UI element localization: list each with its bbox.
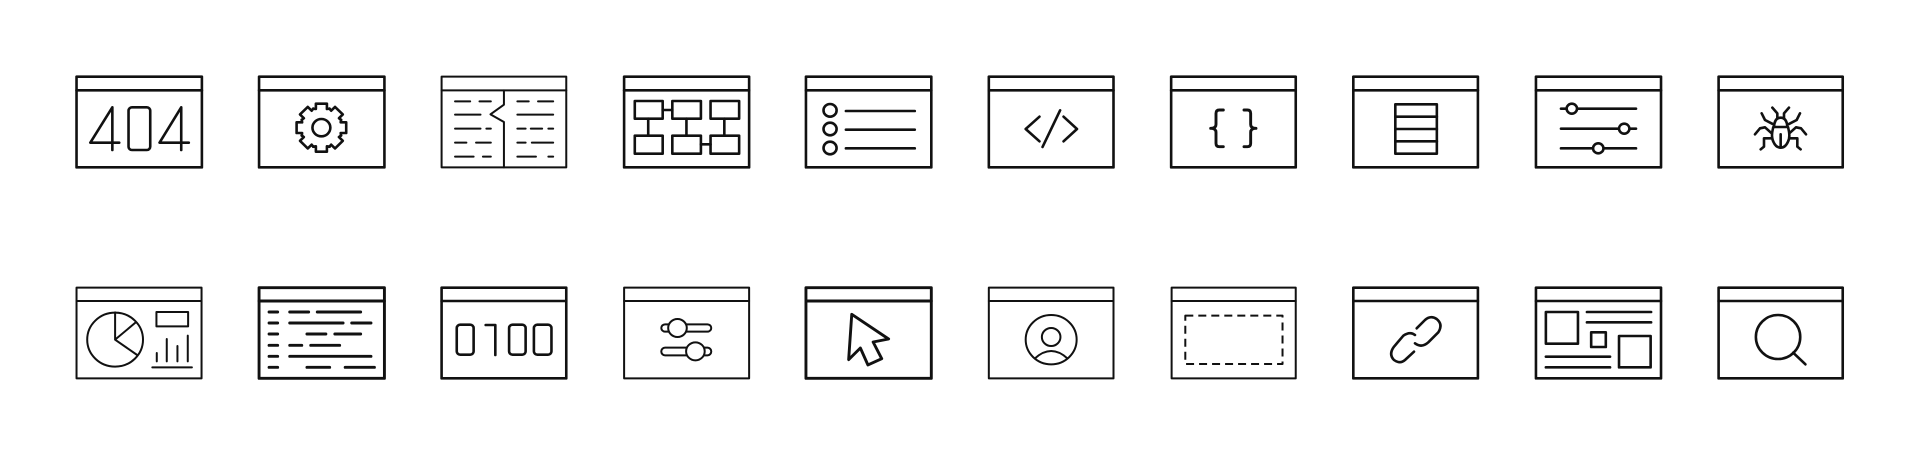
icon: settings gear window: [259, 77, 384, 167]
icon: code tag window: [989, 77, 1114, 167]
icon: dashed selection window: [1172, 288, 1296, 378]
chain link glyph: [1391, 317, 1440, 362]
icon: bug window: [1719, 77, 1843, 167]
icon: analytics dashboard window: [77, 288, 202, 378]
icon: magnifier search window: [1719, 288, 1843, 378]
icon: page layout window: [1536, 288, 1661, 378]
icon: flowchart window: [624, 77, 749, 167]
icon: curly braces window: [1171, 77, 1296, 167]
icon: chain link window: [1353, 288, 1478, 378]
icon: bullet list window: [806, 77, 931, 167]
icon: 404 error window: [77, 77, 202, 167]
bug glyph: [1755, 108, 1806, 149]
icon: binary digits window: [442, 288, 566, 378]
icon: user profile window: [989, 288, 1114, 378]
braces glyph: [1211, 110, 1256, 147]
icon: cursor arrow window: [806, 288, 931, 378]
icon: stacked rows window: [1353, 77, 1478, 167]
icon: broken document window: [442, 77, 566, 167]
icon: code lines window: [259, 288, 384, 378]
icon: toggle sliders window: [624, 288, 749, 378]
icon: sliders window: [1536, 77, 1661, 167]
